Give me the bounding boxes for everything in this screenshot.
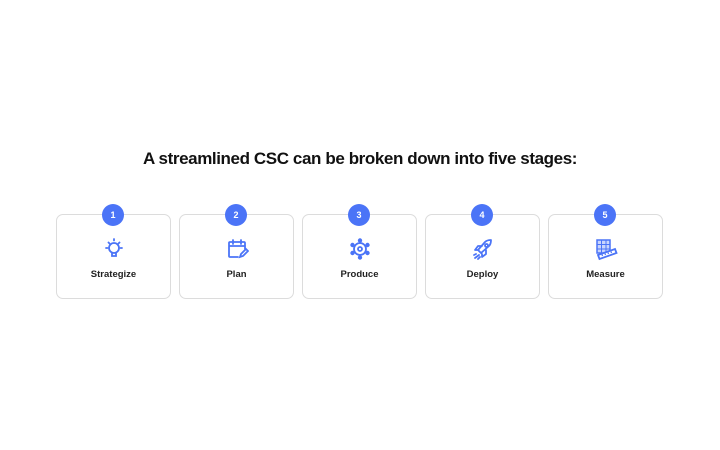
- icon: gear: [350, 238, 370, 260]
- badge 3: [348, 204, 370, 226]
- label: Measure: [586, 269, 625, 280]
- icon: rocket: [473, 239, 492, 260]
- label: Produce: [340, 269, 378, 280]
- card: Plan: [179, 214, 294, 299]
- badge 1: [102, 204, 124, 226]
- badge 1: 1: [110, 210, 116, 220]
- badge 3: 3: [356, 210, 362, 220]
- badge 5: 5: [602, 210, 608, 220]
- icon: grid and ruler: [596, 239, 618, 260]
- title: A streamlined CSC can be broken down into five stages:: [143, 149, 577, 168]
- label: Deploy: [467, 269, 498, 280]
- icon: lightbulb: [105, 238, 123, 257]
- card: Produce: [302, 214, 417, 299]
- badge 5: [594, 204, 616, 226]
- label: Plan: [226, 269, 247, 280]
- badge 4: [471, 204, 493, 226]
- card: Measure: [548, 214, 663, 299]
- icon: calendar: [228, 239, 249, 258]
- card: Deploy: [425, 214, 540, 299]
- badge 2: 2: [233, 210, 238, 220]
- badge 4: 4: [479, 210, 484, 220]
- card: Strategize: [56, 214, 171, 299]
- badge 2: [225, 204, 247, 226]
- label: Strategize: [91, 269, 136, 280]
